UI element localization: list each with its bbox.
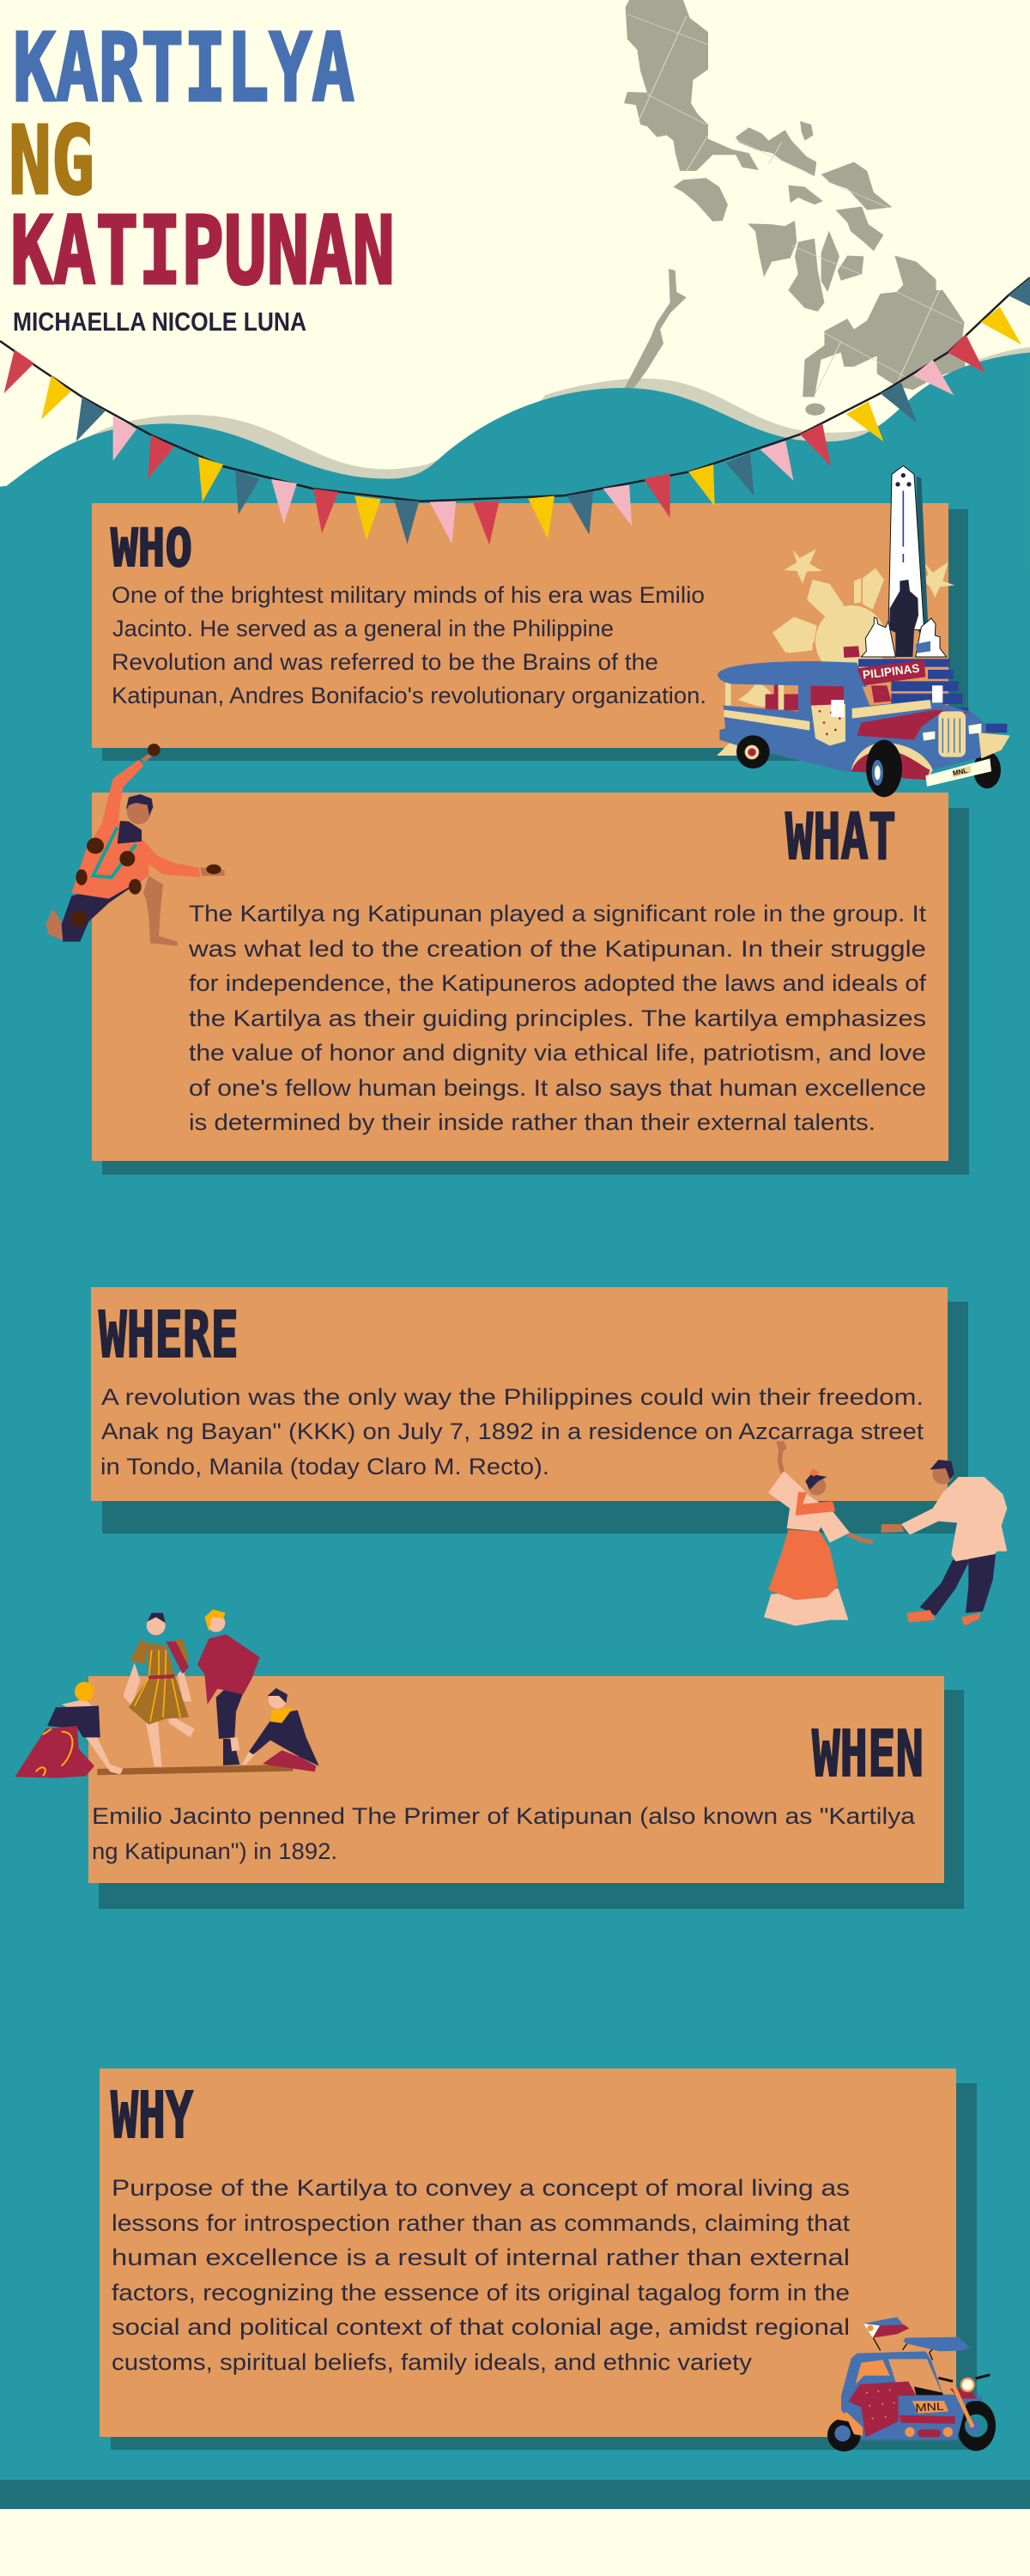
why text: Purpose of the Kartilya to convey a concept of moral living as	[112, 2175, 850, 2201]
philippine sun and stars	[738, 549, 954, 707]
where text: Anak ng Bayan" (KKK) on July 7, 1892 in a residence on Azcarraga street	[101, 1419, 924, 1444]
heading: why: WHY	[111, 2079, 193, 2153]
heading: where: WHERE	[99, 1298, 239, 1372]
woman dancer	[764, 1441, 873, 1625]
seated man	[242, 1688, 319, 1771]
author name: MICHAELLA NICOLE LUNA	[13, 307, 306, 337]
title: KARTILYA	[13, 13, 354, 123]
what text: is determined by their inside rather than their external talents.	[189, 1109, 876, 1135]
illustration: monument and jeepney	[717, 465, 1010, 797]
beige back wave	[92, 347, 1030, 498]
when text: ng Katipunan") in 1892.	[92, 1838, 337, 1864]
illustration: tinikling dancers	[15, 1609, 319, 1778]
what text	[188, 901, 927, 1135]
who text: Katipunan, Andres Bonifacio's revolutionary organization.	[112, 683, 706, 708]
plate text: MNL	[952, 767, 968, 777]
who text: Revolution and was referred to be the Brains of the	[112, 649, 658, 675]
hills and map background	[0, 0, 1030, 569]
plate text: MNL	[915, 2401, 944, 2414]
why text: social and political context of that colonial age, amidst regional	[112, 2314, 850, 2340]
who text	[112, 582, 706, 708]
jeepney	[717, 641, 1010, 797]
teal wave and main background	[0, 352, 1030, 569]
panel: when	[88, 1676, 964, 1909]
why text	[112, 2175, 851, 2375]
woman dancer	[123, 1613, 195, 1766]
what text: was what led to the creation of the Katipunan. In their struggle	[188, 936, 926, 962]
when text: Emilio Jacinto penned The Primer of Katipunan (also known as "Kartilya	[92, 1803, 916, 1829]
sign text: PILIPINAS	[862, 662, 920, 682]
where text	[100, 1384, 924, 1479]
man dancer	[882, 1460, 1007, 1625]
panel: where	[91, 1287, 968, 1534]
panel: who	[92, 503, 968, 761]
what text: The Kartilya ng Katipunan played a significant role in the group. It	[189, 901, 927, 927]
bamboo pole	[97, 1765, 294, 1775]
who text: One of the brightest military minds of his era was Emilio	[112, 582, 705, 608]
heading: when: WHEN	[812, 1717, 924, 1791]
title: NG	[9, 106, 94, 216]
what text: of one's fellow human beings. It also says that human excellence	[189, 1075, 926, 1101]
when text	[92, 1803, 916, 1864]
heading: what: WHAT	[785, 800, 896, 874]
panel: why	[100, 2069, 977, 2450]
why text: factors, recognizing the essence of its original tagalog form in the	[112, 2280, 850, 2306]
why text: lessons for introspection rather than as commands, claiming that	[112, 2210, 851, 2236]
footer band	[0, 2480, 1030, 2509]
what text: the value of honor and dignity via ethical life, patriotism, and love	[189, 1040, 926, 1066]
standing man	[197, 1609, 260, 1765]
bunting	[0, 277, 1030, 544]
obelisk	[861, 465, 947, 657]
where text: in Tondo, Manila (today Claro M. Recto).	[100, 1454, 549, 1479]
illustration: filipino dance couple	[764, 1441, 1007, 1625]
heading: who: WHO	[111, 518, 192, 579]
flag	[863, 2317, 936, 2381]
panel: what	[92, 793, 969, 1175]
illustration: coconut dancer	[45, 744, 225, 946]
what text: the Kartilya as their guiding principles. The kartilya emphasizes	[189, 1005, 926, 1031]
steps	[858, 659, 1007, 732]
where text: A revolution was the only way the Philippines could win their freedom.	[101, 1384, 924, 1410]
seated woman	[15, 1682, 123, 1778]
what text: for independence, the Katipuneros adopted the laws and ideals of	[189, 970, 927, 996]
map of the Philippines	[624, 0, 966, 416]
why text: human excellence is a result of internal rather than external	[112, 2245, 850, 2270]
title	[9, 13, 395, 306]
title: KATIPUNAN	[10, 196, 395, 306]
who text: Jacinto. He served as a general in the Philippine	[112, 616, 614, 641]
illustration: tricycle	[827, 2317, 996, 2451]
why text: customs, spiritual beliefs, family ideals, and ethnic variety	[112, 2349, 753, 2375]
